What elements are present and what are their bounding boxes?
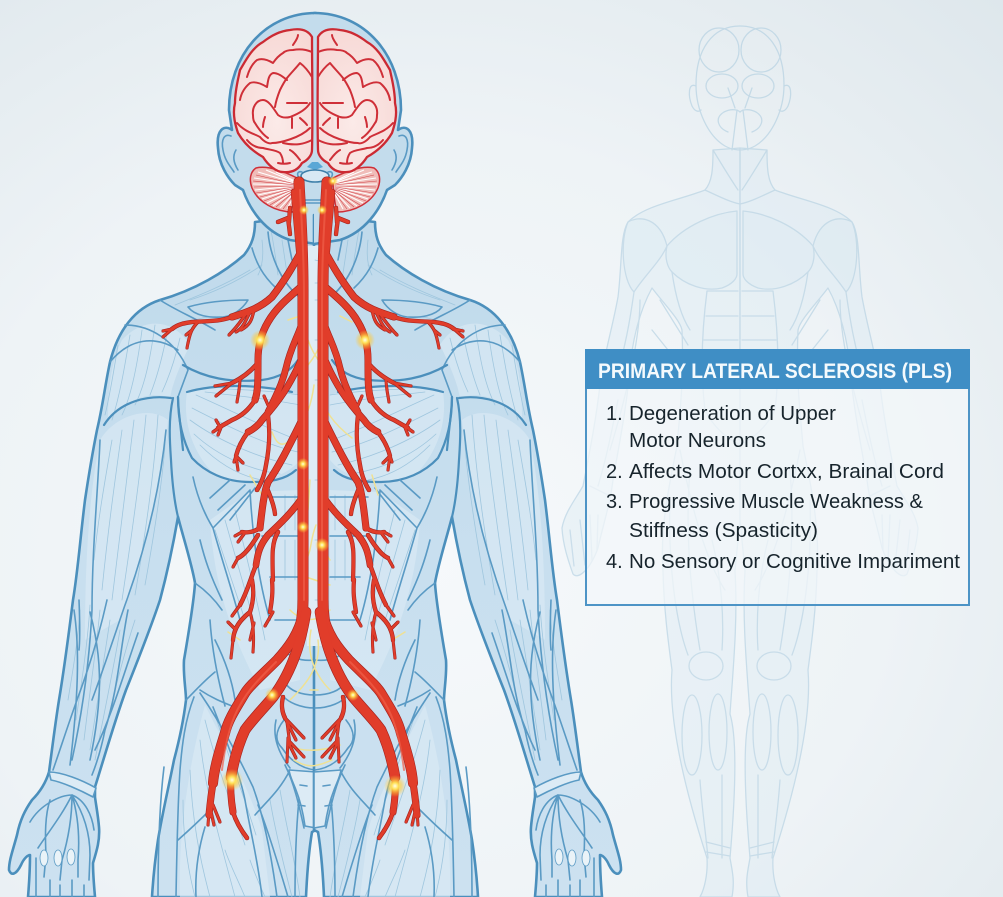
list item 2: Affects Motor Cortxx, Brainal Cord: [629, 461, 944, 483]
wrist band: [49, 772, 96, 797]
red tracts right side: [320, 182, 463, 838]
list item 3: [606, 491, 924, 542]
cerebellum: [250, 167, 297, 212]
rib branch: [260, 420, 302, 528]
brain right half: [318, 29, 396, 212]
upper neck tract: [294, 192, 300, 260]
main anatomical body figure: [9, 13, 621, 897]
list item 2: 2.: [606, 461, 623, 483]
serratus and abdomen lines: [193, 477, 300, 620]
main tract: [298, 182, 303, 640]
list item 4: No Sensory or Cognitive Impariment: [629, 551, 960, 573]
panel body: [586, 350, 969, 605]
central spine vertebrae: [307, 260, 315, 600]
leg tract inner: [231, 612, 306, 777]
brain and cerebellum: [234, 29, 396, 212]
ghost figure: left half: [562, 26, 740, 897]
leg tract outer: [213, 615, 303, 783]
list item 3: Stiffness (Spasticity): [629, 520, 818, 542]
tract highlights: [222, 190, 404, 770]
list item 1: [606, 403, 836, 452]
list item 3: 3.: [606, 491, 623, 513]
yellow nerve network: [228, 316, 405, 766]
shoulder branch with fork: [255, 286, 302, 400]
hip and leg lines: [158, 620, 304, 897]
body: left half muscles and outline: [9, 13, 323, 897]
shoulder and trapezius lines: [110, 232, 298, 397]
ghost figure: right half: [740, 26, 918, 897]
pelvis and sacrum: [289, 770, 316, 828]
brain left half: [234, 29, 312, 212]
body silhouette: [9, 215, 316, 897]
light muscle highlights: [85, 324, 300, 897]
neck twigs: [278, 208, 290, 234]
cerebrum hemisphere: [234, 29, 312, 172]
panel: PLS info box: [585, 349, 970, 605]
brainstem: [298, 162, 332, 203]
body: right half: [307, 13, 621, 897]
chest and pectoral lines: [178, 360, 298, 482]
list item 4: 4.: [606, 551, 623, 573]
abdominal branches: [256, 498, 302, 565]
head and ear: [218, 13, 316, 244]
red tracts left side: [163, 182, 306, 838]
glowing nerve points: [221, 176, 406, 797]
motor neuron tracts in red: [163, 182, 463, 838]
hand tendons and fingers: [30, 795, 94, 897]
list item 1: Degeneration of Upper: [629, 403, 836, 425]
arm branch: [232, 250, 302, 317]
faded background anatomy figure: [562, 26, 918, 897]
brain sulci: [237, 35, 312, 164]
arm lines: [104, 397, 183, 517]
panel header bar: [585, 349, 970, 389]
muscle striations: [68, 225, 300, 897]
pelvic twigs: [282, 697, 285, 718]
central spine strip: [307, 246, 323, 646]
list item 1: Motor Neurons: [629, 430, 766, 452]
chest branch: [268, 326, 301, 412]
list item 3: Progressive Muscle Weakness &: [629, 491, 924, 513]
list item 1: 1.: [606, 403, 623, 425]
panel heading: PRIMARY LATERAL SCLEROSIS (PLS): [598, 359, 952, 383]
